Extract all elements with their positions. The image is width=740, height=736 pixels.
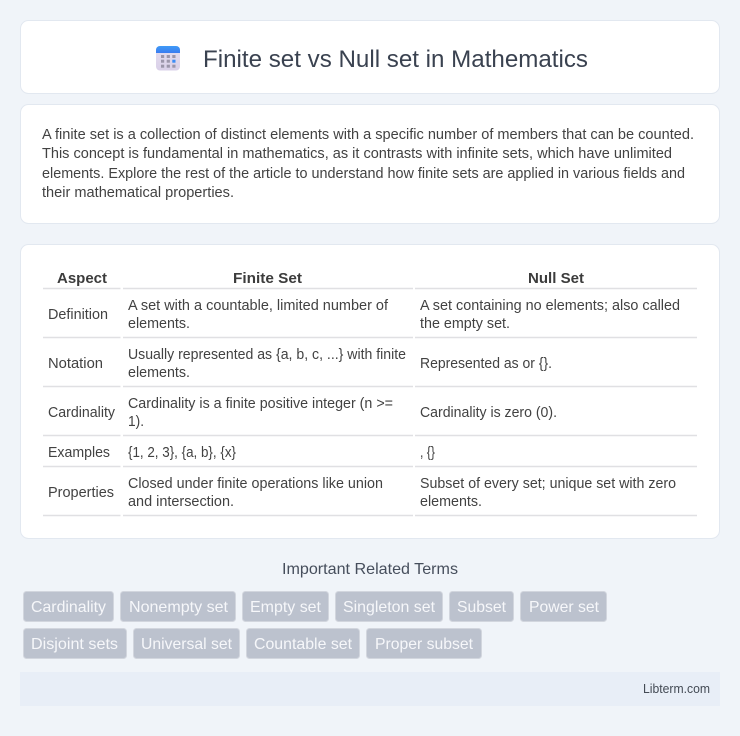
footer credit: Libterm.com <box>643 682 710 696</box>
row: cardinality: Cardinality is zero (0). <box>420 405 557 421</box>
row: cardinality: 1). <box>128 414 144 430</box>
row: properties <box>48 476 676 510</box>
intro text: elements. Explore the rest of the article to understand how finite sets are applied in various fields and <box>42 166 685 182</box>
row: examples: , {} <box>420 445 435 461</box>
tag: Subset: Subset <box>457 599 507 616</box>
table header: Finite Set <box>233 270 302 287</box>
tag: Empty set <box>242 592 328 622</box>
tag: Proper subset: Proper subset <box>375 636 474 653</box>
row: notation: Represented as or {}. <box>420 356 552 372</box>
tag: Empty set: Empty set <box>250 599 322 616</box>
row: notation: Notation <box>48 356 103 372</box>
intro text: This concept is fundamental in mathematics, as it contrasts with infinite sets, which have unlimited <box>42 146 672 162</box>
tag: Nonempty set: Nonempty set <box>129 599 229 616</box>
tag: Cardinality: Cardinality <box>31 599 106 616</box>
row: definition: A set with a countable, limited number of <box>128 298 389 314</box>
panel: comparison table <box>20 244 720 538</box>
tag: Disjoint sets: Disjoint sets <box>31 636 118 653</box>
tag: Singleton set: Singleton set <box>343 599 436 616</box>
tag: Singleton set <box>336 592 442 622</box>
row: properties: and intersection. <box>128 494 234 510</box>
heading: related terms: Important Related Terms <box>282 561 458 578</box>
tag: Subset <box>450 592 514 622</box>
row: definition: elements. <box>128 316 190 332</box>
row: examples: {1, 2, 3}, {a, b}, {x} <box>128 445 236 461</box>
row: cardinality: Cardinality is a finite positive integer (n >= <box>128 396 393 412</box>
table header <box>57 270 584 287</box>
tag: Proper subset <box>366 628 482 658</box>
intro text <box>42 127 694 201</box>
table header: Aspect <box>57 270 107 287</box>
tag: Power set: Power set <box>529 599 600 616</box>
row: definition: the empty set. <box>420 316 510 332</box>
footer <box>20 672 720 706</box>
tag: Countable set: Countable set <box>254 636 353 653</box>
row: properties: Closed under finite operations like union <box>128 476 383 492</box>
row: cardinality: Cardinality <box>48 405 116 421</box>
tag: Universal set <box>134 628 240 658</box>
tag: Cardinality <box>24 592 114 622</box>
intro text: A finite set is a collection of distinct elements with a specific number of members that can be counted. <box>42 127 694 143</box>
row: properties: Properties <box>48 485 114 501</box>
row: properties: elements. <box>420 494 482 510</box>
row: definition <box>48 298 680 332</box>
panel: title header <box>20 20 720 94</box>
row: examples: Examples <box>48 445 110 461</box>
row: definition: Definition <box>48 307 108 323</box>
table header: Null Set <box>528 270 584 287</box>
row: definition: A set containing no elements; also called <box>420 298 680 314</box>
panel: introduction <box>20 104 720 224</box>
related term tags <box>24 592 606 658</box>
tag: Nonempty set <box>120 592 236 622</box>
tag: Countable set <box>246 628 360 658</box>
tag: Disjoint sets <box>24 628 126 658</box>
tag: Universal set: Universal set <box>141 636 233 653</box>
icon: calendar <box>156 46 180 70</box>
intro text: their mathematical properties. <box>42 185 234 201</box>
row: notation <box>48 347 552 381</box>
row: notation: elements. <box>128 365 190 381</box>
row: notation: Usually represented as {a, b, c, ...} with finite <box>128 347 406 363</box>
title: Finite set vs Null set in Mathematics <box>203 46 588 73</box>
tag: Power set <box>520 592 606 622</box>
row: examples <box>48 445 435 461</box>
row: properties: Subset of every set; unique set with zero <box>420 476 676 492</box>
row: cardinality <box>48 396 557 430</box>
